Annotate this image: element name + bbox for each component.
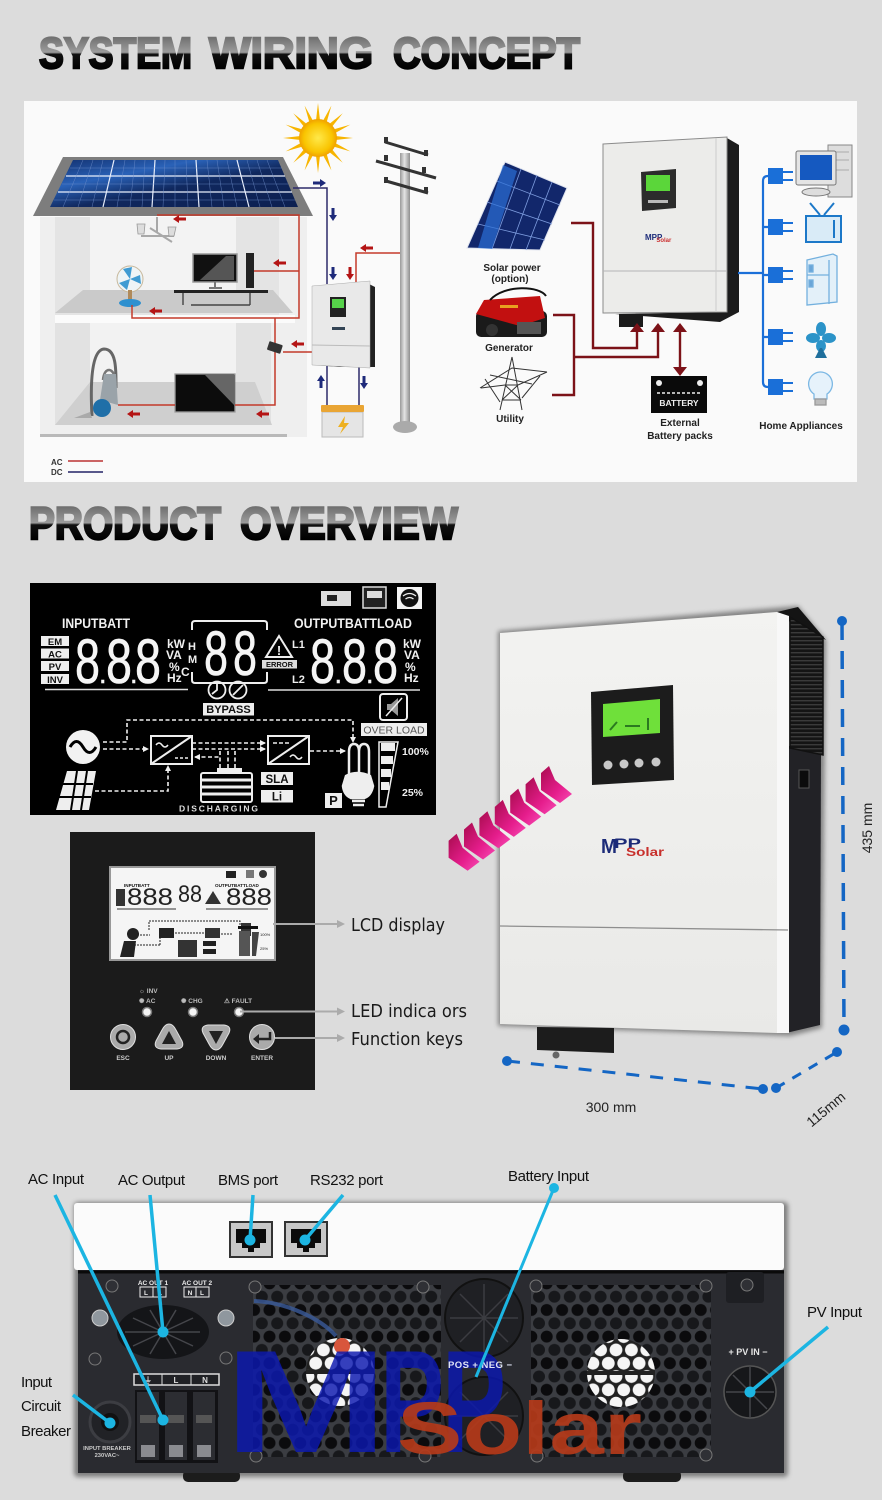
legend bbox=[51, 458, 103, 477]
breaker terminal header: ⏚ bbox=[144, 1376, 152, 1385]
watermark logo MPP: P bbox=[380, 1320, 444, 1483]
plug 4 bbox=[769, 330, 793, 344]
input units bbox=[166, 637, 190, 685]
icon: battery stack bbox=[201, 768, 252, 802]
plug 3 bbox=[769, 268, 793, 282]
label: output batt load: OUTPUTBATTLOAD bbox=[294, 616, 412, 631]
mute icon bbox=[380, 694, 407, 720]
solar label: (option) bbox=[491, 274, 529, 285]
blue distribution bus bbox=[738, 176, 773, 387]
generator bbox=[476, 288, 547, 337]
phase labels: L1 bbox=[292, 639, 305, 651]
SLA tag: SLA bbox=[266, 774, 288, 786]
top right tab bbox=[726, 1272, 764, 1303]
arrow: LCD display bbox=[273, 920, 345, 928]
AC output terminals bbox=[138, 1280, 213, 1297]
callout: BMS port bbox=[218, 1172, 279, 1246]
energy flow dashes bbox=[95, 720, 353, 791]
mini LCD: INPUTBATT bbox=[124, 883, 150, 888]
dimension: depth bbox=[771, 1047, 842, 1093]
output units: kW bbox=[403, 637, 422, 651]
source tags: EM bbox=[48, 637, 62, 648]
Li tag bbox=[261, 790, 293, 804]
small inverter bbox=[312, 281, 375, 368]
battery label: Battery packs bbox=[647, 431, 713, 442]
red source wiring bbox=[552, 223, 680, 395]
vent bbox=[790, 617, 823, 755]
key labels bbox=[116, 1055, 273, 1062]
battery block bbox=[651, 376, 707, 413]
output digits bbox=[310, 627, 398, 697]
load level bars bbox=[379, 742, 398, 807]
icon: bulb load bbox=[343, 744, 373, 805]
source tags bbox=[41, 636, 69, 686]
legend: AC bbox=[51, 458, 63, 467]
input digits: 8 bbox=[135, 627, 161, 697]
chandelier bbox=[137, 217, 176, 242]
heading: system wiring concept: SYSTEM bbox=[39, 29, 192, 78]
inverter front view bbox=[498, 606, 826, 1058]
red logo dot bbox=[334, 1338, 350, 1354]
blue swoosh bbox=[254, 1301, 336, 1336]
callout: PV input: PV Input bbox=[807, 1304, 863, 1321]
side switch bbox=[799, 770, 809, 788]
rear shadow bbox=[74, 1202, 788, 1477]
output digits: 8 bbox=[342, 627, 367, 697]
input units: C bbox=[181, 665, 190, 679]
SLA tag bbox=[261, 772, 293, 786]
callout: AC input: AC Input bbox=[28, 1171, 85, 1188]
fan struts bbox=[306, 1372, 655, 1373]
battery label: External bbox=[660, 418, 700, 429]
input breaker label bbox=[83, 1446, 132, 1459]
generator label: Generator bbox=[485, 343, 533, 354]
label: width: 300 mm bbox=[586, 1099, 636, 1115]
warning triangle bbox=[266, 636, 292, 658]
breaker terminal header: L bbox=[174, 1376, 179, 1385]
output units: Hz bbox=[404, 671, 419, 685]
callout: AC input bbox=[28, 1171, 168, 1426]
dimension: height bbox=[837, 616, 850, 1036]
callout: BMS port: BMS port bbox=[218, 1172, 279, 1189]
mini LCD: 100% bbox=[260, 932, 271, 937]
warning triangle: ! bbox=[277, 643, 281, 658]
icon: AC source bbox=[66, 730, 100, 764]
utility pole bbox=[376, 137, 436, 433]
heading: system wiring concept bbox=[39, 29, 580, 78]
PV polarity label: + PV IN − bbox=[728, 1347, 768, 1357]
callout: RS232 port bbox=[300, 1172, 384, 1246]
inverter side bbox=[615, 138, 739, 322]
arrow: LED indicators bbox=[240, 1008, 345, 1016]
brand logo: M bbox=[601, 836, 617, 858]
mini LCD: 888 bbox=[127, 884, 173, 911]
source tags: AC bbox=[48, 650, 62, 660]
front face bbox=[500, 612, 777, 1033]
AC output terminals: L bbox=[200, 1290, 204, 1297]
dimension: width bbox=[502, 1056, 768, 1094]
label: depth: 115mm bbox=[803, 1088, 848, 1130]
appliances label: Home Appliances bbox=[759, 421, 843, 432]
RJ45 port BMS bbox=[230, 1222, 272, 1257]
Li tag: Li bbox=[272, 792, 282, 804]
side panel bbox=[786, 745, 821, 1033]
phase labels bbox=[292, 639, 305, 686]
mini LCD: 888 bbox=[226, 884, 272, 911]
discharging label: DISCHARGING bbox=[179, 804, 258, 814]
LED labels: ✺ AC bbox=[139, 997, 156, 1005]
arrow: function keys bbox=[275, 1034, 345, 1042]
icon: inverter block bbox=[268, 736, 309, 764]
knockouts battery bbox=[445, 1279, 523, 1455]
watermark logo MPP bbox=[224, 1320, 506, 1483]
load percent: 25% bbox=[402, 787, 424, 799]
icon: fan bbox=[806, 322, 836, 358]
wires DC bbox=[293, 188, 359, 405]
callout: battery input: Battery Input bbox=[508, 1168, 590, 1185]
desk fan bbox=[117, 266, 143, 307]
diagram: house with solar roof bbox=[33, 103, 436, 477]
solar array bbox=[50, 160, 298, 207]
mesh right bbox=[531, 1285, 711, 1457]
time digits bbox=[204, 619, 257, 689]
flow arrows AC bbox=[127, 215, 373, 418]
load percent bbox=[402, 746, 430, 799]
input units: kW bbox=[167, 637, 186, 651]
time letters bbox=[188, 641, 197, 666]
callout: LED indicators: LED indica ors bbox=[351, 1002, 467, 1022]
top dark edge bbox=[777, 607, 826, 640]
time bracket bbox=[192, 621, 267, 683]
time digits: 8 bbox=[233, 619, 257, 689]
output units: % bbox=[405, 660, 416, 674]
panel buttons bbox=[604, 758, 660, 770]
panel: LCD segment legend bbox=[30, 583, 436, 815]
P tag: P bbox=[329, 793, 338, 808]
flow arrowheads bbox=[143, 737, 356, 771]
input breaker label: INPUT BREAKER bbox=[83, 1446, 132, 1452]
overload tag: OVER LOAD bbox=[363, 724, 425, 736]
callout: function keys: Function keys bbox=[351, 1030, 463, 1050]
wires AC bbox=[118, 215, 400, 405]
PV input gland bbox=[724, 1366, 776, 1418]
legend: DC bbox=[51, 468, 63, 477]
AC output terminals: N bbox=[188, 1290, 193, 1297]
mini LCD: OUTPUTBATTLOAD bbox=[215, 883, 259, 888]
icon: computer bbox=[796, 145, 852, 197]
diagram: system connection bbox=[467, 137, 852, 442]
side strip bbox=[777, 612, 789, 1033]
inverter mount bbox=[619, 314, 643, 327]
output units: VA bbox=[404, 648, 420, 662]
callout: input circuit breaker: Breaker bbox=[21, 1423, 71, 1440]
rear panel bbox=[78, 1270, 784, 1473]
callout: input circuit breaker: Circuit bbox=[21, 1398, 62, 1415]
television bbox=[175, 374, 235, 412]
top status icons bbox=[321, 587, 422, 609]
watermark logo MPP: P bbox=[442, 1320, 506, 1483]
source tags: PV bbox=[49, 662, 62, 673]
label: height: 435 mm bbox=[859, 803, 875, 853]
brand logo: Solar bbox=[626, 845, 664, 859]
breaker terminal header: N bbox=[202, 1376, 208, 1385]
battery bbox=[321, 405, 364, 437]
heading: product overview: PRODUCT bbox=[29, 498, 221, 549]
plug 5 bbox=[769, 380, 793, 394]
callout: RS232 port: RS232 port bbox=[310, 1172, 384, 1189]
screws bbox=[89, 1280, 712, 1462]
LED labels: ⚠ FAULT bbox=[224, 997, 252, 1005]
icon: tv bbox=[806, 203, 841, 242]
output digits: 8 bbox=[310, 627, 335, 697]
mini LCD bbox=[110, 867, 275, 960]
green LCD bbox=[603, 699, 660, 737]
function key: down bbox=[202, 1025, 230, 1050]
input digits: 8 bbox=[106, 627, 132, 697]
fan hub left bbox=[306, 1338, 374, 1406]
bypass tag: BYPASS bbox=[206, 704, 251, 716]
ground lugs bbox=[92, 1310, 234, 1326]
plug 1 bbox=[769, 169, 793, 183]
icon: charger block bbox=[151, 736, 192, 764]
key labels: DOWN bbox=[206, 1055, 227, 1062]
computer on desk bbox=[174, 253, 268, 305]
input digits: 8 bbox=[75, 627, 100, 697]
clock and wrench icons bbox=[208, 682, 246, 698]
phase labels: L2 bbox=[292, 674, 305, 686]
vacuum cleaner bbox=[74, 349, 118, 418]
icon: sun bbox=[283, 103, 353, 173]
LED indicators bbox=[142, 1008, 244, 1016]
callout: battery input bbox=[476, 1168, 590, 1377]
callout: PV input bbox=[744, 1304, 863, 1398]
flow arrows DC bbox=[313, 179, 368, 389]
label: input batt: INPUTBATT bbox=[62, 616, 131, 631]
function key: enter bbox=[250, 1024, 274, 1050]
mount bracket bbox=[537, 1027, 614, 1053]
input breaker label: 230VAC~ bbox=[95, 1453, 120, 1459]
solar panel source bbox=[467, 162, 567, 250]
LED labels: ☼ INV bbox=[139, 988, 158, 995]
heading: product overview bbox=[29, 498, 458, 549]
callout: LCD display: LCD display bbox=[351, 916, 445, 936]
callout: input circuit breaker: Input bbox=[21, 1374, 53, 1391]
input units: % bbox=[169, 660, 180, 674]
icon: PV panel bbox=[56, 771, 96, 810]
watermark logo Solar: Solar bbox=[397, 1387, 642, 1470]
utility label: Utility bbox=[496, 414, 524, 425]
battery block: BATTERY bbox=[659, 398, 699, 408]
heading: system wiring concept: CONCEPT bbox=[393, 29, 580, 78]
output units bbox=[403, 637, 422, 685]
inverter front bbox=[603, 137, 727, 313]
icon: bulb bbox=[809, 372, 832, 405]
battery polarity label: POS + NEG − bbox=[448, 1360, 512, 1371]
panel: wiring diagrams bbox=[24, 101, 857, 482]
utility tower bbox=[480, 357, 547, 410]
inverter shadow bbox=[498, 606, 826, 1036]
key labels: UP bbox=[164, 1055, 174, 1062]
mini LCD: 88 bbox=[178, 881, 202, 908]
RJ45 port RS232 bbox=[285, 1222, 327, 1256]
wiring arrowheads bbox=[630, 323, 687, 376]
control panel bbox=[591, 685, 674, 785]
function key: up bbox=[155, 1024, 183, 1049]
top white cover bbox=[74, 1203, 784, 1270]
heading: product overview: OVERVIEW bbox=[240, 498, 458, 549]
roof bbox=[33, 157, 313, 216]
rear view of inverter bbox=[74, 1202, 788, 1483]
AC output terminals: L bbox=[158, 1290, 162, 1297]
input breaker knob bbox=[90, 1402, 130, 1442]
input digits bbox=[75, 627, 161, 697]
time letters: M bbox=[188, 654, 197, 666]
time letters: H bbox=[188, 641, 196, 653]
inverter logo: MPP bbox=[645, 233, 662, 242]
function key: esc bbox=[110, 1024, 136, 1050]
inverter logo: Solar bbox=[656, 238, 672, 244]
AC output terminals: AC OUT 1 bbox=[138, 1280, 169, 1287]
heading: system wiring concept: WIRING bbox=[209, 29, 373, 78]
P tag bbox=[325, 793, 342, 808]
panel: display and controls bbox=[70, 832, 315, 1090]
output digits: 8 bbox=[373, 627, 398, 697]
rear feet bbox=[183, 1470, 681, 1482]
brand logo bbox=[601, 835, 664, 859]
plug 2 bbox=[769, 220, 793, 234]
input units: Hz bbox=[167, 671, 182, 685]
error tag: ERROR bbox=[266, 660, 294, 669]
load percent: 100% bbox=[402, 746, 430, 758]
AC output terminals: AC OUT 2 bbox=[182, 1280, 213, 1287]
time digits: 8 bbox=[204, 619, 228, 689]
callout: AC output: AC Output bbox=[118, 1172, 186, 1189]
breaker terminal header bbox=[134, 1374, 219, 1385]
AC output knockout bbox=[117, 1305, 209, 1359]
AC output terminals: L bbox=[144, 1290, 148, 1297]
mesh left bbox=[253, 1285, 441, 1457]
callout: input circuit breaker bbox=[21, 1374, 116, 1440]
watermark logo MPP: M bbox=[224, 1320, 388, 1483]
icon: fridge bbox=[807, 254, 837, 305]
pink chevron arrows bbox=[449, 766, 572, 871]
input units: VA bbox=[166, 648, 182, 662]
house walls bbox=[40, 217, 307, 437]
brand logo: PP bbox=[614, 835, 641, 851]
callout: AC output bbox=[118, 1172, 186, 1338]
LED labels bbox=[139, 988, 252, 1005]
key labels: ENTER bbox=[251, 1055, 273, 1062]
mini LCD: 25% bbox=[260, 946, 268, 951]
solar label: Solar power bbox=[483, 263, 541, 274]
source tags: INV bbox=[47, 675, 64, 686]
key labels: ESC bbox=[116, 1055, 130, 1062]
breaker terminals bbox=[135, 1390, 218, 1463]
LED labels: ✺ CHG bbox=[181, 997, 203, 1005]
fan hub right bbox=[587, 1339, 655, 1407]
